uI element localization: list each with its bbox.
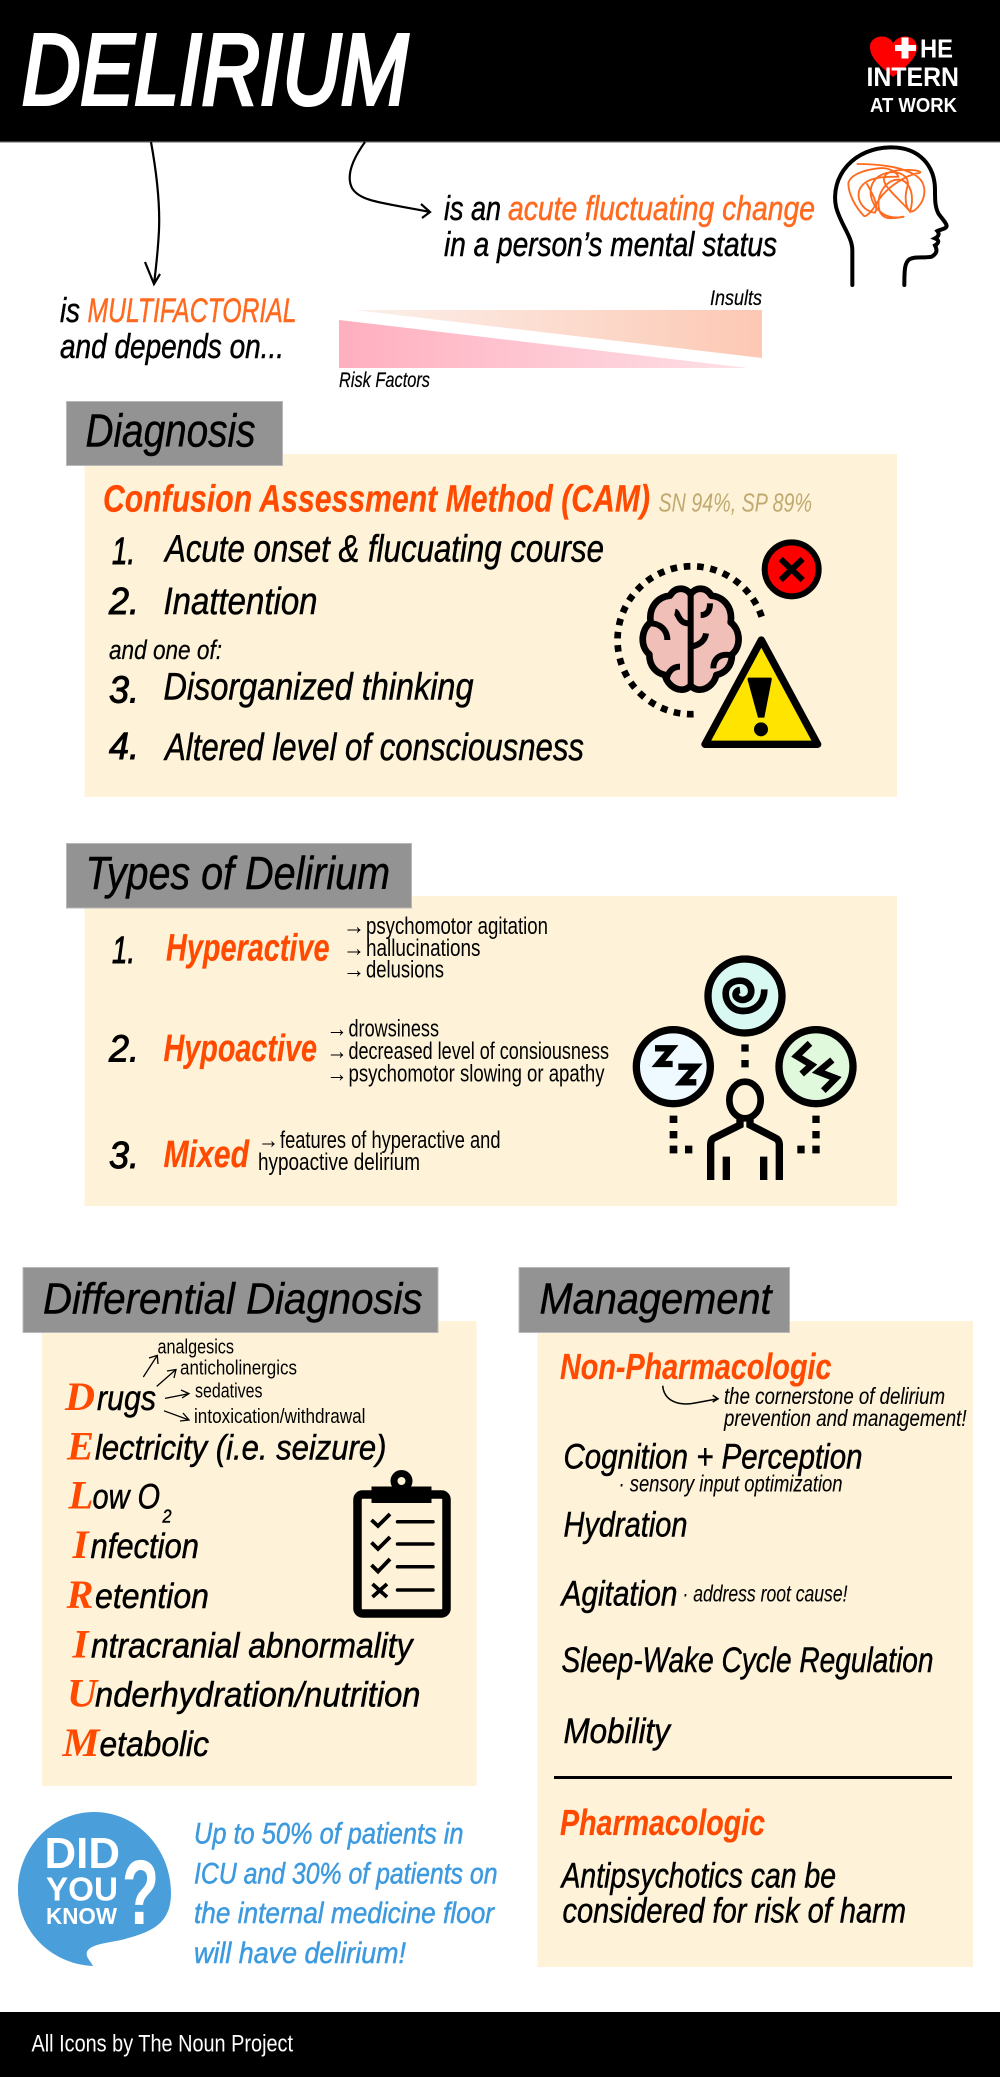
text: delirium prevalence: the internal medicine floor — [194, 1897, 495, 1930]
list: CAM criteria — [108, 528, 604, 769]
list: hyperactive: Hyperactive — [166, 928, 330, 970]
icon: did you know speech bubble: ? — [122, 1842, 159, 1944]
list: DELIRIUM mnemonic: D — [64, 1374, 95, 1419]
section: pharmacologic: Antipsychotics can be — [560, 1856, 836, 1896]
list: DELIRIUM mnemonic: I — [71, 1522, 90, 1567]
section: pharmacologic — [560, 1802, 906, 1930]
list: CAM criteria: Altered level of consciousness — [163, 727, 584, 769]
list: CAM criteria: Acute onset & flucuating course — [163, 528, 604, 570]
list: hypoactive: → — [326, 1016, 348, 1042]
list: hyperactive — [112, 913, 548, 984]
list: hyperactive: delusions — [366, 956, 444, 984]
list: drug classes — [143, 1336, 366, 1428]
text: acute fluctuating change: in a person’s mental status — [444, 226, 777, 264]
list: CAM criteria: 1. — [112, 531, 135, 573]
text: multifactorial: and depends on... — [60, 328, 284, 366]
list: drug classes: analgesics — [158, 1336, 234, 1358]
icon: person with three thought bubbles — [636, 959, 853, 1180]
list: mixed: 3. — [109, 1135, 139, 1177]
text: multifactorial — [60, 292, 296, 366]
list: DELIRIUM mnemonic: nderhydration/nutrition — [95, 1676, 420, 1714]
list: DELIRIUM mnemonic: nfection — [90, 1527, 199, 1566]
text: delirium prevalence: will have delirium! — [194, 1937, 407, 1970]
list: CAM criteria: 4. — [109, 726, 139, 768]
heading: differential diagnosis: Differential Diagnosis — [43, 1274, 422, 1324]
list: DELIRIUM mnemonic: M — [61, 1720, 101, 1765]
list: mixed: → — [258, 1127, 279, 1154]
list: DELIRIUM mnemonic: I — [71, 1622, 90, 1666]
text: acute fluctuating change — [444, 190, 815, 264]
list: DELIRIUM mnemonic: R — [65, 1572, 94, 1617]
list: DELIRIUM mnemonic: lectricity (i.e. seizure) — [95, 1428, 386, 1468]
chart: insults and risk factors wedges: Insults — [710, 287, 762, 310]
list: drug classes: anticholinergics — [180, 1358, 297, 1380]
section: non-pharmacologic: Mobility — [564, 1712, 672, 1751]
list: DELIRIUM mnemonic: E — [66, 1424, 94, 1468]
icon: clipboard checklist — [358, 1474, 446, 1614]
text: delirium prevalence: ICU and 30% of patients on — [194, 1858, 498, 1890]
heading: management: Management — [540, 1274, 773, 1324]
list: DELIRIUM mnemonic: etabolic — [100, 1725, 209, 1764]
list: hyperactive: → — [343, 913, 365, 940]
list: hypoactive — [108, 1016, 609, 1088]
section: non-pharmacologic: Cognition + Perception — [564, 1438, 862, 1476]
text: delirium prevalence: Up to 50% of patients in — [194, 1818, 464, 1850]
section: non-pharmacologic: the cornerstone of delirium — [724, 1383, 945, 1409]
list: hyperactive: → — [343, 935, 365, 962]
list: DELIRIUM mnemonic: etention — [95, 1577, 209, 1616]
logo: The Intern at Work — [866, 34, 959, 117]
section: non-pharmacologic: · sensory input optimization — [618, 1470, 842, 1496]
icon: did you know speech bubble — [18, 1812, 171, 1966]
text: multifactorial: is — [60, 292, 80, 330]
title: DELIRIUM — [22, 14, 409, 126]
list: hypoactive: → — [326, 1038, 348, 1065]
list: hypoactive: 2. — [108, 1028, 139, 1070]
icon: brain with warning signs — [618, 542, 819, 744]
list: CAM criteria: Disorganized thinking — [164, 666, 474, 708]
panel: diagnosis — [66, 402, 897, 797]
text: CAM title: Confusion Assessment Method (CAM) — [103, 478, 650, 520]
list: hypoactive: drowsiness — [348, 1016, 439, 1042]
icon: did you know speech bubble: YOU — [46, 1870, 118, 1908]
icon: head with tangled thoughts — [835, 147, 947, 285]
logo: The Intern at Work: HE — [920, 34, 953, 64]
list: hypoactive: Hypoactive — [164, 1028, 317, 1070]
list: mixed: hypoactive delirium — [258, 1149, 420, 1176]
list: CAM criteria: and one of: — [109, 635, 222, 665]
list: DELIRIUM mnemonic: ow O — [92, 1478, 160, 1516]
list: hyperactive: → — [343, 956, 365, 984]
chart: insults and risk factors wedges: Risk Factors — [339, 369, 430, 392]
list: DELIRIUM mnemonic: ntracranial abnormality — [91, 1626, 415, 1666]
list: hyperactive: 1. — [112, 930, 135, 972]
panel: differential diagnosis — [23, 1268, 476, 1786]
section: non-pharmacologic — [560, 1346, 967, 1751]
list: CAM criteria: Inattention — [164, 581, 318, 623]
text: acute fluctuating change: is an — [444, 190, 501, 228]
heading: differential diagnosis — [23, 1268, 438, 1332]
arrow: header to multifactorial — [145, 142, 160, 284]
section: pharmacologic: Pharmacologic — [560, 1802, 765, 1843]
footer band — [0, 2012, 1000, 2077]
section: non-pharmacologic: Hydration — [564, 1506, 688, 1544]
list: drug classes: intoxication/withdrawal — [194, 1406, 366, 1428]
text: delirium prevalence — [194, 1818, 498, 1970]
list: hypoactive: → — [326, 1060, 348, 1088]
heading: management — [519, 1268, 790, 1332]
list: DELIRIUM mnemonic: rugs — [97, 1379, 156, 1418]
list: mixed — [109, 1127, 500, 1177]
heading: diagnosis: Diagnosis — [86, 404, 256, 456]
list: DELIRIUM mnemonic: U — [67, 1670, 99, 1716]
text: CAM title: SN 94%, SP 89% — [658, 488, 812, 518]
list: drug classes: sedatives — [195, 1380, 262, 1402]
list: mixed: Mixed — [164, 1134, 250, 1176]
list: DELIRIUM mnemonic — [61, 1374, 421, 1765]
list: hyperactive: hallucinations — [366, 935, 480, 962]
list: hypoactive: psychomotor slowing or apathy — [348, 1060, 604, 1088]
icon: did you know speech bubble: KNOW — [46, 1903, 117, 1929]
text: multifactorial: MULTIFACTORIAL — [88, 292, 296, 330]
list: DELIRIUM mnemonic: L — [67, 1472, 94, 1518]
arrow: header to acute change — [350, 142, 430, 218]
logo: The Intern at Work: AT WORK — [870, 95, 958, 117]
icon: did you know speech bubble: DID — [44, 1829, 120, 1878]
header band — [0, 0, 1000, 143]
section: non-pharmacologic: Agitation — [560, 1574, 678, 1614]
callout: did you know — [18, 1812, 498, 1970]
text: acute fluctuating change: acute fluctuating change — [508, 190, 815, 228]
panel: management — [519, 1268, 973, 1967]
chart: insults and risk factors wedges — [339, 287, 762, 392]
section: pharmacologic: considered for risk of harm — [562, 1892, 906, 1930]
list: DELIRIUM mnemonic: 2 — [162, 1506, 172, 1526]
list: hypoactive: decreased level of consiousness — [348, 1038, 609, 1065]
list: CAM criteria: 3. — [109, 670, 139, 712]
list: mixed: features of hyperactive and — [280, 1127, 500, 1154]
section: non-pharmacologic: Non-Pharmacologic — [560, 1346, 832, 1387]
heading: types of delirium: Types of Delirium — [86, 847, 390, 899]
logo: The Intern at Work: INTERN — [866, 62, 959, 92]
list: hyperactive: psychomotor agitation — [366, 913, 548, 940]
section: non-pharmacologic: · address root cause! — [682, 1580, 848, 1606]
panel: types of delirium — [66, 844, 897, 1206]
footer band: All Icons by The Noun Project — [32, 2030, 293, 2058]
list: CAM criteria: 2. — [108, 581, 139, 623]
